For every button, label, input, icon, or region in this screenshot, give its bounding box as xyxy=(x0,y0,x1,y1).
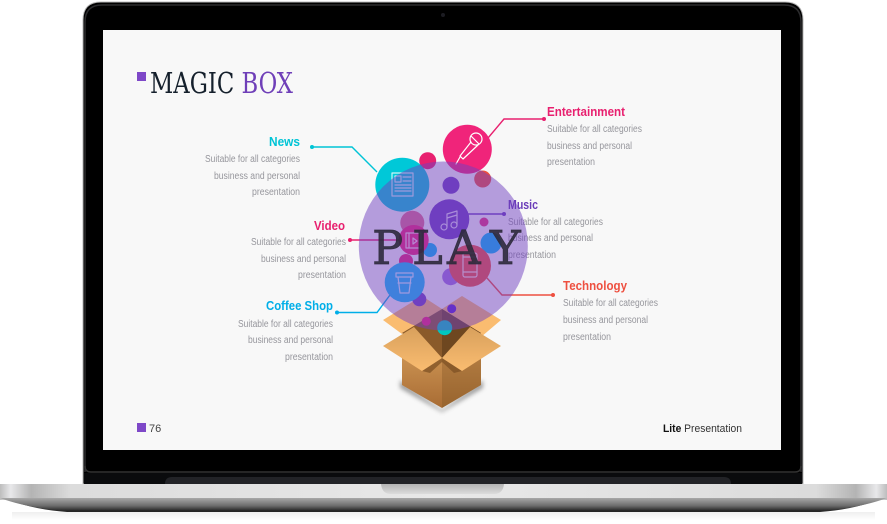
circle: coffee xyxy=(385,262,425,302)
label: entertainment: presentation xyxy=(547,157,595,168)
hinge xyxy=(165,477,731,484)
box front faces xyxy=(402,358,442,408)
label: news: News xyxy=(269,135,300,149)
label: news: business and personal xyxy=(214,171,300,182)
label: entertainment: Suitable for all categories xyxy=(547,124,642,135)
circle: news xyxy=(375,158,429,212)
circle: video xyxy=(399,225,429,255)
label: entertainment xyxy=(547,105,642,168)
icon: smartphone xyxy=(463,253,477,277)
connector: music xyxy=(468,213,503,215)
label: coffee shop: Coffee Shop xyxy=(266,299,333,313)
connector: entertainment xyxy=(488,119,543,138)
icon: newspaper xyxy=(392,173,413,196)
notch xyxy=(381,484,504,494)
label: entertainment: business and personal xyxy=(547,141,632,152)
label: technology: presentation xyxy=(563,332,611,343)
icon: microphone xyxy=(456,133,482,164)
connector: coffee shop xyxy=(337,295,390,312)
label: entertainment: Entertainment xyxy=(547,105,626,119)
box inside xyxy=(402,309,481,358)
circle: technology xyxy=(449,245,491,287)
purple glow circle xyxy=(359,162,528,330)
footer: page number: 76 xyxy=(149,423,161,435)
label: video: presentation xyxy=(298,270,346,281)
label: technology xyxy=(563,279,658,343)
label: technology: Technology xyxy=(563,279,627,293)
title text: MAGIC BOX xyxy=(150,67,294,100)
label: news: presentation xyxy=(252,187,300,198)
circle: music xyxy=(429,199,469,239)
title marker xyxy=(137,72,146,81)
label: coffee shop: Suitable for all categories xyxy=(238,319,333,330)
label: music: presentation xyxy=(508,250,556,261)
label: coffee shop: business and personal xyxy=(248,335,333,346)
laptop base xyxy=(0,484,887,512)
label: coffee shop: presentation xyxy=(285,352,333,363)
label: video xyxy=(251,219,346,281)
icon: coffee cup xyxy=(396,273,413,293)
connector: technology xyxy=(487,278,553,295)
connector lines xyxy=(312,119,553,312)
screen xyxy=(103,30,781,450)
label: music: Suitable for all categories xyxy=(508,217,603,228)
play overlay: PLAY xyxy=(372,221,522,275)
label: coffee shop xyxy=(238,299,333,363)
icon: music note xyxy=(441,211,457,230)
box flap shadows xyxy=(422,358,462,373)
connector end dots xyxy=(310,117,555,314)
label: news xyxy=(205,135,300,198)
label: video: Suitable for all categories xyxy=(251,237,346,248)
icon: video xyxy=(406,233,421,248)
box shadow xyxy=(400,380,483,412)
label: music: Music xyxy=(508,198,538,212)
footer: brand: Lite Presentation xyxy=(663,423,742,435)
connector: news xyxy=(312,147,377,172)
laptop lid xyxy=(83,2,803,484)
label: video: business and personal xyxy=(261,254,346,265)
title xyxy=(137,67,294,100)
label: technology: Suitable for all categories xyxy=(563,298,658,309)
connector: video xyxy=(350,239,400,241)
circle: microphone xyxy=(443,125,492,174)
label: news: Suitable for all categories xyxy=(205,154,300,165)
camera xyxy=(441,13,445,17)
box front flaps xyxy=(383,327,442,371)
label: video: Video xyxy=(314,219,345,233)
shadow xyxy=(12,512,875,520)
label: technology: business and personal xyxy=(563,315,648,326)
cardboard box xyxy=(383,296,501,412)
footer: page number xyxy=(137,423,161,435)
bubbles xyxy=(399,152,502,335)
label: music xyxy=(508,198,603,261)
label: music: business and personal xyxy=(508,233,593,244)
box back flaps xyxy=(383,296,442,334)
